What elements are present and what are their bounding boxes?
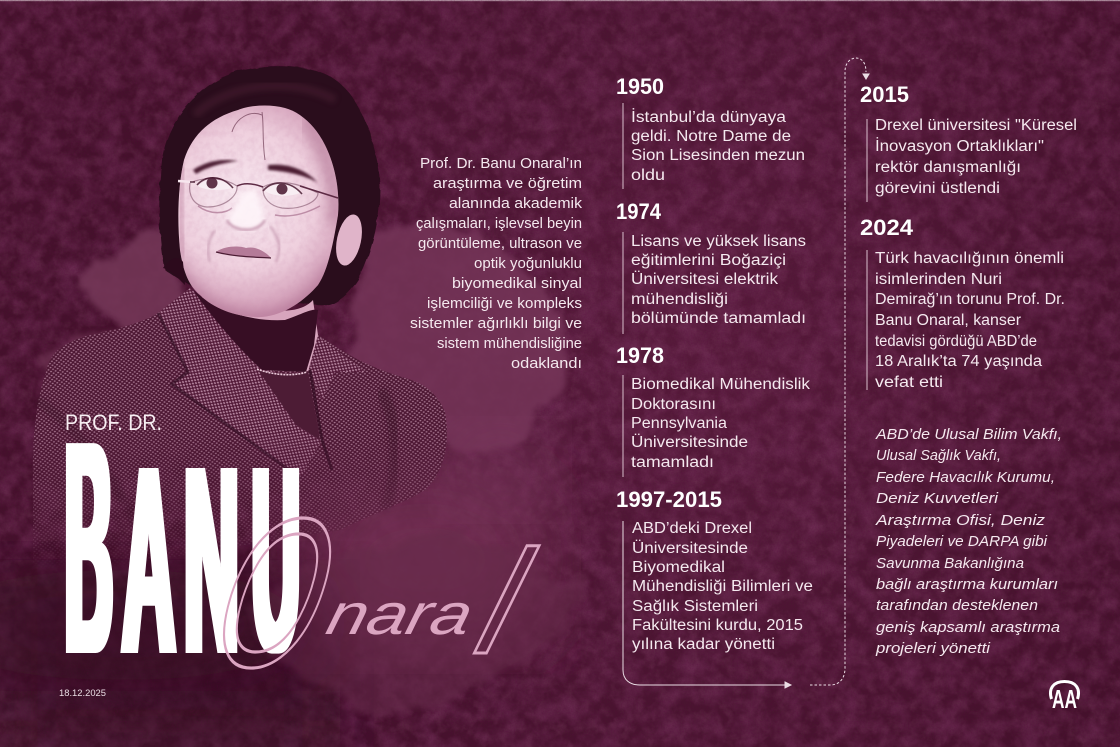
intro paragraph: araştırma ve öğretim	[433, 175, 582, 192]
italic research note: Deniz Kuvvetleri	[876, 491, 999, 507]
timeline entry 1997-2015: 1997-2015	[616, 487, 722, 512]
timeline entry 1974: 1974	[616, 199, 662, 224]
italic research note: bağlı araştırma kurumları	[876, 577, 1058, 593]
intro paragraph: Prof. Dr. Banu Onaral’ın	[420, 155, 582, 172]
italic research note: Piyadeleri ve DARPA gibi	[876, 534, 1048, 550]
banu large name: U	[252, 412, 300, 709]
timeline entry 1974: mühendisliği	[631, 291, 728, 308]
intro paragraph: odaklandı	[511, 355, 582, 372]
neck	[198, 285, 318, 372]
turtleneck	[193, 290, 318, 372]
italic research note: Federe Havacılık Kurumu,	[876, 470, 1055, 486]
timeline entry 2015: rektör danışmanlığı	[875, 159, 1021, 176]
timeline entry 1974: Lisans ve yüksek lisans	[631, 233, 806, 250]
timeline entry 1978: Üniversitesinde	[631, 433, 748, 451]
intro paragraph: görüntüleme, ultrason ve	[418, 235, 582, 252]
timeline entry 1997-2015: yılına kadar yönetti	[632, 636, 775, 653]
timeline entry 2024: Türk havacılığının önemli	[875, 250, 1064, 267]
onaral script surname: l	[462, 520, 548, 685]
timeline entry 1978	[616, 343, 810, 477]
dark fade over jacket base	[0, 570, 320, 680]
face	[178, 106, 338, 317]
timeline entry 1950: İstanbul’da dünyaya	[631, 108, 786, 126]
timeline entry 2024: Demirağ’ın torunu Prof. Dr.	[875, 291, 1065, 308]
timeline entry 2024: Banu Onaral, kanser	[875, 312, 1021, 329]
timeline entry 2015	[860, 82, 1077, 202]
onaral script surname: O	[195, 476, 356, 712]
timeline entry 2024: 18 Aralık’ta 74 yaşında	[875, 353, 1042, 370]
mouth	[216, 247, 271, 258]
intro paragraph: biyomedikal sinyal	[452, 275, 582, 292]
timeline entry 1997-2015: Üniversitesinde	[632, 539, 748, 557]
intro paragraph: optik yoğunluklu	[474, 255, 582, 272]
brows	[193, 160, 238, 174]
timeline entry 2015: 2015	[860, 82, 909, 107]
timeline entry 1950: oldu	[631, 167, 665, 184]
ear	[332, 212, 366, 268]
timeline entry 2024: isimlerinden Nuri	[875, 271, 1002, 288]
timeline entry 1978: 1978	[616, 343, 664, 368]
timeline entry 1950	[616, 74, 805, 189]
italic research note	[875, 427, 1062, 657]
banu large name	[65, 377, 300, 718]
timeline entry 1997-2015: Mühendisliği Bilimleri ve	[632, 578, 813, 595]
glasses	[178, 179, 338, 208]
watercolor smoke behind portrait	[35, 222, 580, 715]
hair strands over forehead	[232, 112, 265, 160]
connecting arrow between columns	[623, 58, 869, 688]
timeline entry 1997-2015: ABD’deki Drexel	[632, 520, 752, 537]
prof. dr. label: PROF. DR.	[65, 410, 162, 435]
timeline entry 2024: vefat etti	[875, 374, 943, 391]
timeline entry 1950: 1950	[616, 74, 664, 99]
italic research note: projeleri yönetti	[875, 641, 991, 657]
timeline entry 2024	[860, 215, 1065, 391]
name title	[65, 377, 548, 718]
timeline entry 1950: geldi. Notre Dame de	[631, 128, 791, 145]
onaral script surname: nara	[321, 581, 480, 647]
italic research note: Savunma Bakanlığına	[876, 556, 1024, 572]
onaral script surname	[195, 476, 548, 712]
intro paragraph: çalışmaları, işlevsel beyin	[416, 215, 582, 232]
blouse and necklace	[258, 370, 320, 440]
short hair wisp	[163, 258, 185, 285]
timeline entry 1997-2015: Biyomedikal	[632, 559, 725, 576]
hair back	[159, 66, 380, 306]
intro paragraph: sistemler ağırlıklı bilgi ve	[410, 315, 582, 332]
timeline entry 2015: İnovasyon Ortaklıkları"	[875, 137, 1044, 155]
timeline entry 1997-2015	[616, 487, 813, 653]
date: 18.12.2025	[59, 688, 106, 699]
skin texture and shading	[178, 117, 338, 317]
timeline entry 1978: Doktorasını	[631, 396, 716, 413]
nose	[227, 190, 265, 230]
italic research note: tarafından desteklenen	[876, 598, 1038, 614]
timeline entry 2024: 2024	[860, 215, 914, 240]
hair highlight	[195, 86, 335, 115]
timeline entry 2015: görevini üstlendi	[875, 180, 1000, 197]
italic research note: Ulusal Sağlık Vakfı,	[876, 448, 1001, 464]
intro paragraph: alanında akademik	[449, 195, 583, 212]
timeline entry 2024: tedavisi gördüğü ABD’de	[875, 333, 1037, 350]
timeline entry 2015: Drexel üniversitesi "Küresel	[875, 117, 1077, 134]
timeline entry 1978: tamamladı	[631, 454, 714, 471]
timeline entry 1974: Üniversitesi elektrik	[631, 270, 778, 288]
timeline entry 1974	[616, 199, 806, 334]
timeline entry 1974: eğitimlerini Boğaziçi	[631, 252, 786, 269]
timeline entry 1978: Pennsylvania	[631, 415, 727, 432]
banu large name: A	[122, 409, 175, 710]
timeline entry 1997-2015: Sağlık Sistemleri	[632, 598, 758, 615]
timeline entry 1950: Sion Lisesinden mezun	[631, 147, 805, 164]
icon: AA agency logo: AA	[1052, 684, 1077, 714]
timeline entry 1997-2015: Fakültesini kurdu, 2015	[632, 617, 803, 634]
intro paragraph: işlemciliği ve kompleks	[427, 295, 582, 312]
jacket	[33, 288, 447, 580]
intro paragraph: sistem mühendisliğine	[437, 335, 582, 352]
italic research note: Araştırma Ofisi, Deniz	[875, 513, 1046, 529]
timeline entry 1974: bölümünde tamamladı	[631, 310, 806, 327]
italic research note: ABD’de Ulusal Bilim Vakfı,	[875, 427, 1062, 443]
intro paragraph	[410, 155, 583, 372]
eyes	[197, 178, 302, 196]
icon: AA agency logo	[1050, 682, 1079, 714]
portrait of Banu Onaral	[33, 66, 447, 580]
banu large name: N	[184, 409, 239, 710]
italic research note: geniş kapsamlı araştırma	[876, 620, 1060, 636]
timeline entry 1978: Biomedikal Mühendislik	[631, 376, 810, 393]
banu large name: B	[65, 377, 113, 718]
